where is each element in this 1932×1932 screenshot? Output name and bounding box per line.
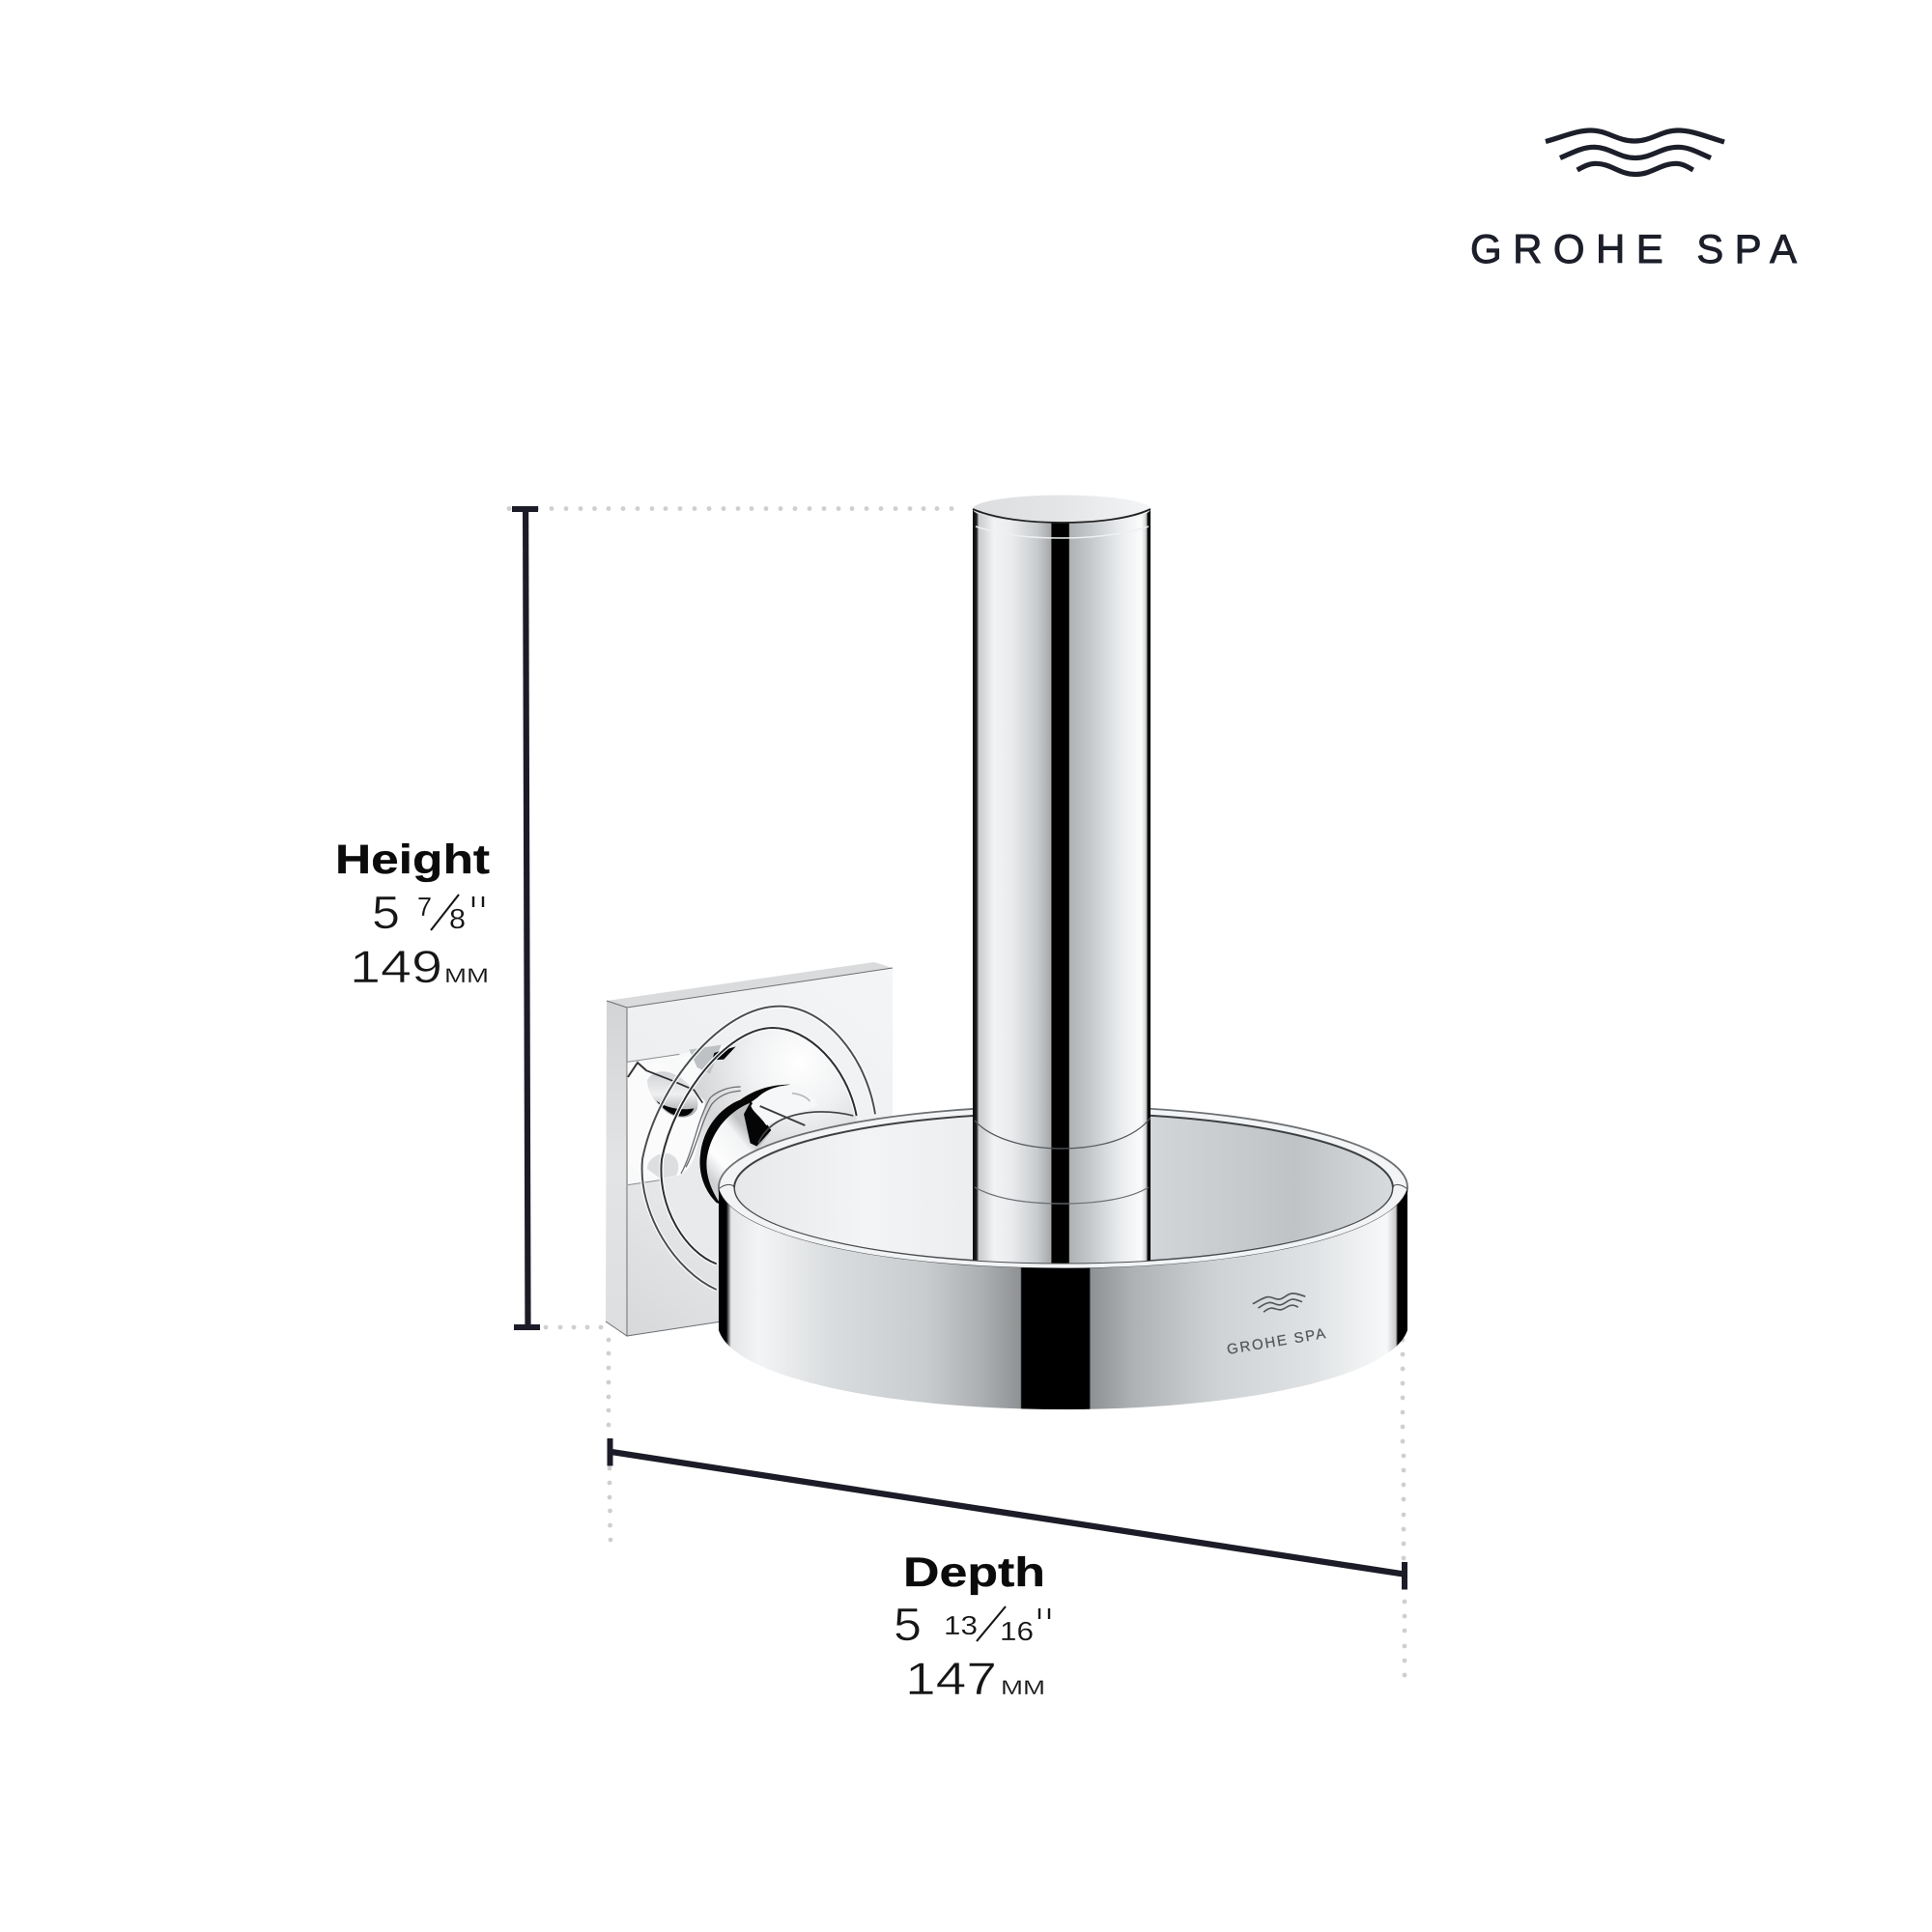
logo: GROHE SPA — [1470, 130, 1797, 271]
bowl outer wall — [719, 1189, 1407, 1409]
mounting rings — [642, 1007, 875, 1290]
neck — [703, 1103, 770, 1201]
product: chrome holder — [606, 495, 1407, 1409]
icon: logo waves — [1546, 130, 1724, 174]
height in millimetres: MM — [444, 965, 489, 987]
depth in millimetres: 147 — [905, 1653, 997, 1704]
height in inches — [372, 888, 483, 939]
depth in inches: 5 — [894, 1600, 922, 1651]
engraved logo on bowl — [1226, 1292, 1326, 1358]
height heading: Height — [335, 837, 490, 883]
depth in inches: 13 — [944, 1610, 978, 1640]
domed mount — [661, 1028, 857, 1264]
height in millimetres — [350, 941, 489, 992]
depth in millimetres — [905, 1653, 1045, 1704]
height label — [335, 837, 490, 992]
engraved waves — [1252, 1292, 1307, 1314]
dotted guide lines — [507, 506, 1406, 1677]
wall bracket and neck — [627, 1007, 875, 1290]
depth in inches: 16 — [1000, 1616, 1034, 1646]
logo wordmark: GROHE SPA — [1470, 226, 1797, 271]
depth heading: Depth — [903, 1549, 1045, 1596]
depth label — [894, 1549, 1049, 1704]
height in inches: 5 — [372, 888, 400, 939]
depth in millimetres: MM — [1001, 1677, 1045, 1699]
height in millimetres: 149 — [350, 941, 442, 992]
bowl interior — [734, 1113, 1393, 1264]
height in inches: 8 — [449, 904, 466, 935]
bowl rim — [719, 1106, 1407, 1268]
depth dimension arrow — [607, 1438, 1407, 1590]
height in inches: 7 — [417, 892, 432, 922]
depth in inches — [894, 1600, 1049, 1651]
bowl front rim band — [719, 1184, 1407, 1268]
slot in the plate — [627, 1045, 727, 1185]
vertical post — [973, 495, 1151, 1267]
wall plate — [606, 962, 893, 1336]
height dimension arrow — [512, 506, 540, 1330]
engraved wordmark: GROHE SPA — [1226, 1325, 1326, 1358]
